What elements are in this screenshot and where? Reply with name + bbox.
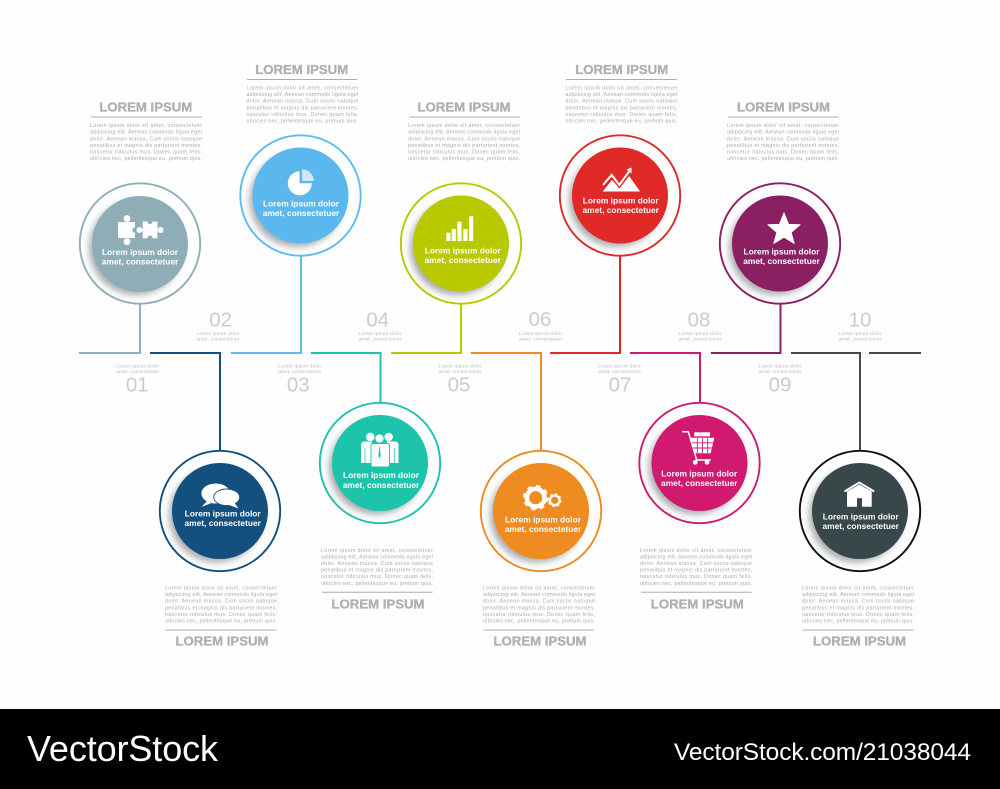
connector 01 — [79, 304, 140, 353]
node label 01 — [102, 247, 179, 267]
panel: step 06 — [471, 308, 601, 649]
node label 02: amet, consectetuer — [184, 518, 262, 528]
text block 01 — [90, 99, 203, 162]
connector 05 — [391, 304, 461, 353]
text block 10: ultricies nec, pellentesque eu, pretium quis. — [802, 618, 914, 624]
text block 06: Lorem ipsum dolor sit amet, consectetuer — [483, 586, 595, 592]
number 02 — [196, 309, 240, 342]
number 06 — [519, 308, 562, 342]
number 08 — [678, 309, 722, 342]
text block 01: LOREM IPSUM — [99, 99, 192, 114]
text block 04: dolor. Aenean massa. Cum sociis natoque — [321, 561, 433, 567]
number 02: amet, consectetuer — [196, 336, 240, 342]
text block 09: adipiscing elit. Aenean commodo ligula eget — [727, 130, 840, 136]
node label 10: Lorem ipsum dolor — [823, 512, 899, 522]
number 08: 08 — [688, 309, 710, 332]
text block 05: penatibus et magnis dis parturient montes, — [408, 143, 520, 149]
number 01: amet, consectetuer — [116, 369, 160, 375]
text block 09: LOREM IPSUM — [737, 99, 830, 114]
number 05 — [438, 364, 482, 397]
text block 08: Lorem ipsum dolor sit amet, consectetuer — [640, 548, 752, 554]
number 09: 09 — [769, 374, 791, 397]
text block 06: dolor. Aenean massa. Cum sociis natoque — [483, 599, 595, 605]
icon: pie chart — [288, 169, 314, 195]
node label 03 — [263, 198, 340, 218]
number 05: 05 — [448, 374, 470, 397]
panel: step 02 — [150, 309, 280, 649]
footer image id: VectorStock.com/21038044 — [674, 739, 971, 766]
text block 04: ultricies nec, pellentesque eu, pretium quis. — [321, 581, 433, 587]
text block 07: Lorem ipsum dolor sit amet, consectetuer — [566, 86, 678, 92]
panel: step 08 — [630, 309, 760, 611]
node circle 08 — [639, 403, 760, 523]
text block 09: penatibus et magnis dis parturient montes, — [727, 143, 839, 149]
node label 08: amet, consectetuer — [661, 478, 738, 488]
text block 05: Lorem ipsum dolor sit amet, consectetuer — [408, 123, 520, 129]
text block 08: adipiscing elit. Aenean commodo ligula eget — [640, 554, 753, 560]
connector 04 — [311, 353, 380, 402]
number 07: amet, consectetuer — [598, 369, 641, 375]
node label 07: amet, consectetuer — [582, 205, 660, 215]
number 09: amet, consectetuer — [758, 369, 802, 375]
number 03: amet, consectetuer — [278, 369, 322, 375]
text block 10: dolor. Aenean massa. Cum sociis natoque — [802, 599, 914, 605]
text block 08: LOREM IPSUM — [651, 596, 744, 611]
text block 07: LOREM IPSUM — [575, 62, 668, 77]
node label 04 — [343, 470, 420, 490]
node label 05: amet, consectetuer — [424, 255, 502, 265]
connector 06 — [471, 353, 541, 450]
number 04: 04 — [366, 309, 389, 332]
text block 04 — [321, 548, 434, 611]
text block 01: ultricies nec, pellentesque eu, pretium quis. — [90, 156, 202, 162]
node label 05 — [424, 246, 502, 265]
text block 02: adipiscing elit. Aenean commodo ligula eget — [165, 592, 278, 598]
text block 08: nascetur ridiculus mus. Donec quam felis, — [640, 574, 752, 580]
text block 10 — [802, 586, 915, 649]
text block 04: adipiscing elit. Aenean commodo ligula eget — [321, 554, 434, 560]
panel: step 10 — [791, 309, 921, 649]
number 10: amet, consectetuer — [838, 336, 882, 342]
text block 06: LOREM IPSUM — [494, 634, 586, 649]
node label 06 — [505, 514, 582, 534]
text block 07: penatibus et magnis dis parturient montes, — [566, 105, 678, 111]
footer logo text: VectorStock — [27, 728, 219, 769]
number 06: Lorem ipsum dolor — [519, 331, 562, 337]
text block 06: adipiscing elit. Aenean commodo ligula eget — [483, 592, 596, 598]
number 01: Lorem ipsum dolor — [116, 364, 160, 370]
text block 03: dolor. Aenean massa. Cum sociis natoque — [246, 99, 359, 105]
node label 08 — [661, 468, 738, 488]
node label 05: Lorem ipsum dolor — [425, 246, 501, 256]
panel: step 07 — [550, 62, 680, 397]
text block 06: nascetur ridiculus mus. Donec quam felis, — [483, 612, 595, 618]
number 02: 02 — [209, 309, 232, 332]
text block 06 — [483, 586, 596, 649]
connector 07 — [550, 256, 620, 353]
number 01: 01 — [126, 374, 149, 397]
icon: bar chart — [446, 216, 473, 241]
text block 02: dolor. Aenean massa. Cum sociis natoque — [165, 599, 277, 605]
number 07 — [598, 364, 641, 397]
node circle 05 — [401, 183, 521, 304]
watermark footer bar — [0, 709, 1000, 789]
text block 07: adipiscing elit. Aenean commodo ligula eget — [566, 92, 678, 98]
number 09: Lorem ipsum dolor — [758, 364, 802, 370]
text block 01: dolor. Aenean massa. Cum sociis natoque — [90, 136, 202, 142]
node label 10 — [822, 512, 900, 531]
text block 06: ultricies nec, pellentesque eu, pretium quis. — [483, 618, 595, 624]
text block 03: ultricies nec, pellentesque eu, pretium quis. — [246, 118, 358, 124]
text block 08: dolor. Aenean massa. Cum sociis natoque — [640, 561, 752, 567]
text block 05: nascetur ridiculus mus. Donec quam felis, — [408, 150, 520, 156]
text block 09: ultricies nec, pellentesque eu, pretium quis. — [727, 156, 839, 162]
text block 04: nascetur ridiculus mus. Donec quam felis, — [321, 574, 433, 580]
node label 09 — [743, 246, 820, 266]
connector 10 — [791, 353, 921, 450]
text block 04: Lorem ipsum dolor sit amet, consectetuer — [321, 548, 433, 554]
node label 06: Lorem ipsum dolor — [505, 514, 582, 524]
text block 09: dolor. Aenean massa. Cum sociis natoque — [727, 136, 839, 142]
panel: step 03 — [231, 62, 361, 397]
text block 09 — [727, 99, 840, 162]
number 10 — [838, 309, 882, 342]
icon: puzzle pieces — [118, 215, 164, 245]
number 03: Lorem ipsum dolor — [278, 364, 322, 370]
text block 01: Lorem ipsum dolor sit amet, consectetuer — [90, 123, 202, 129]
text block 05: adipiscing elit. Aenean commodo ligula eget — [408, 130, 521, 136]
number 04: amet, consectetuer — [358, 336, 402, 342]
node circle 03 — [240, 135, 361, 256]
node label 04: amet, consectetuer — [343, 480, 420, 490]
panel: step 04 — [311, 309, 440, 611]
panel: step 01 — [79, 99, 203, 397]
number 02: Lorem ipsum dolor — [196, 331, 240, 337]
text block 05: dolor. Aenean massa. Cum sociis natoque — [408, 136, 520, 142]
number 08: amet, consectetuer — [678, 336, 722, 342]
text block 04: LOREM IPSUM — [332, 596, 424, 611]
text block 03: Lorem ipsum dolor sit amet, consectetuer — [246, 86, 359, 92]
number 07: 07 — [609, 374, 631, 397]
node label 03: amet, consectetuer — [263, 208, 340, 218]
number 03 — [278, 364, 322, 397]
text block 07: ultricies nec, pellentesque eu, pretium quis. — [566, 118, 678, 124]
text block 08 — [640, 548, 753, 611]
text block 05: LOREM IPSUM — [418, 99, 510, 114]
text block 03: nascetur ridiculus mus. Donec quam felis, — [246, 112, 358, 118]
text block 03: LOREM IPSUM — [255, 62, 348, 77]
number 05: amet, consectetuer — [438, 369, 482, 375]
text block 10: penatibus et magnis dis parturient montes, — [802, 605, 914, 611]
text block 01: nascetur ridiculus mus. Donec quam felis, — [90, 150, 202, 156]
node circle 10 — [800, 451, 920, 571]
text block 02 — [165, 586, 278, 649]
node label 02 — [184, 508, 262, 528]
number 06: 06 — [529, 308, 551, 331]
icon: people group — [361, 433, 398, 467]
text block 02: nascetur ridiculus mus. Donec quam felis, — [165, 612, 277, 618]
text block 05 — [408, 99, 521, 162]
number 10: 10 — [849, 309, 871, 332]
node label 06: amet, consectetuer — [505, 524, 582, 534]
number 04 — [358, 309, 402, 342]
icon: speech bubbles — [201, 484, 240, 508]
text block 05: ultricies nec, pellentesque eu, pretium quis. — [408, 156, 520, 162]
text block 04: penatibus et magnis dis parturient montes, — [321, 568, 433, 574]
text block 03: penatibus et magnis dis parturient montes, — [246, 105, 358, 111]
connector 09 — [711, 304, 780, 353]
text block 08: penatibus et magnis dis parturient montes, — [640, 568, 752, 574]
node label 10: amet, consectetuer — [822, 521, 900, 531]
node circle 07 — [560, 135, 680, 256]
connector 02 — [150, 353, 220, 450]
node label 01: Lorem ipsum dolor — [102, 247, 179, 257]
text block 07 — [566, 62, 678, 124]
node label 04: Lorem ipsum dolor — [343, 470, 420, 480]
node circle 04 — [320, 403, 440, 523]
panel: step 05 — [391, 99, 521, 397]
icon: shopping cart — [682, 432, 714, 465]
text block 10: LOREM IPSUM — [813, 634, 906, 649]
connector 08 — [630, 353, 700, 402]
text block 03 — [246, 62, 359, 124]
node label 02: Lorem ipsum dolor — [185, 508, 261, 518]
node label 07: Lorem ipsum dolor — [583, 196, 659, 206]
text block 02: LOREM IPSUM — [176, 634, 268, 649]
text block 07: nascetur ridiculus mus. Donec quam felis, — [566, 112, 678, 118]
number 08: Lorem ipsum dolor — [678, 331, 722, 337]
number 07: Lorem ipsum dolor — [598, 364, 641, 370]
icon: gears — [524, 486, 561, 509]
text block 02: penatibus et magnis dis parturient montes, — [165, 605, 277, 611]
text block 02: Lorem ipsum dolor sit amet, consectetuer — [165, 586, 277, 592]
text block 10: adipiscing elit. Aenean commodo ligula eget — [802, 592, 915, 598]
node circle 01 — [80, 183, 200, 304]
text block 10: nascetur ridiculus mus. Donec quam felis, — [802, 612, 914, 618]
text block 08: ultricies nec, pellentesque eu, pretium quis. — [640, 581, 752, 587]
text block 07: dolor. Aenean massa. Cum sociis natoque — [566, 99, 678, 105]
number 06: amet, consectetuer — [519, 336, 562, 342]
node label 01: amet, consectetuer — [102, 257, 179, 267]
panel: step 09 — [711, 99, 840, 397]
number 04: Lorem ipsum dolor — [358, 331, 402, 337]
text block 09: Lorem ipsum dolor sit amet, consectetuer — [727, 123, 839, 129]
node label 07 — [582, 196, 660, 215]
number 10: Lorem ipsum dolor — [838, 331, 882, 337]
node label 03: Lorem ipsum dolor — [263, 198, 340, 208]
number 03: 03 — [287, 374, 310, 397]
text block 01: penatibus et magnis dis parturient montes, — [90, 143, 202, 149]
icon: house — [844, 482, 874, 507]
text block 01: adipiscing elit. Aenean commodo ligula eget — [90, 130, 203, 136]
icon: mountain line chart — [603, 168, 640, 192]
number 05: Lorem ipsum dolor — [438, 364, 482, 370]
number 01 — [116, 364, 160, 397]
node circle 06 — [481, 451, 601, 571]
node label 08: Lorem ipsum dolor — [661, 468, 738, 478]
node circle 02 — [160, 451, 280, 571]
icon: star — [768, 213, 800, 244]
text block 02: ultricies nec, pellentesque eu, pretium quis. — [165, 618, 277, 624]
node label 09: Lorem ipsum dolor — [744, 246, 820, 256]
text block 09: nascetur ridiculus mus. Donec quam felis, — [727, 150, 839, 156]
number 09 — [758, 364, 802, 397]
node label 09: amet, consectetuer — [743, 256, 820, 266]
text block 06: penatibus et magnis dis parturient montes, — [483, 605, 595, 611]
connector 03 — [231, 256, 301, 353]
text block 03: adipiscing elit. Aenean commodo ligula eget — [246, 92, 359, 98]
node circle 09 — [720, 183, 840, 304]
text block 10: Lorem ipsum dolor sit amet, consectetuer — [802, 586, 914, 592]
